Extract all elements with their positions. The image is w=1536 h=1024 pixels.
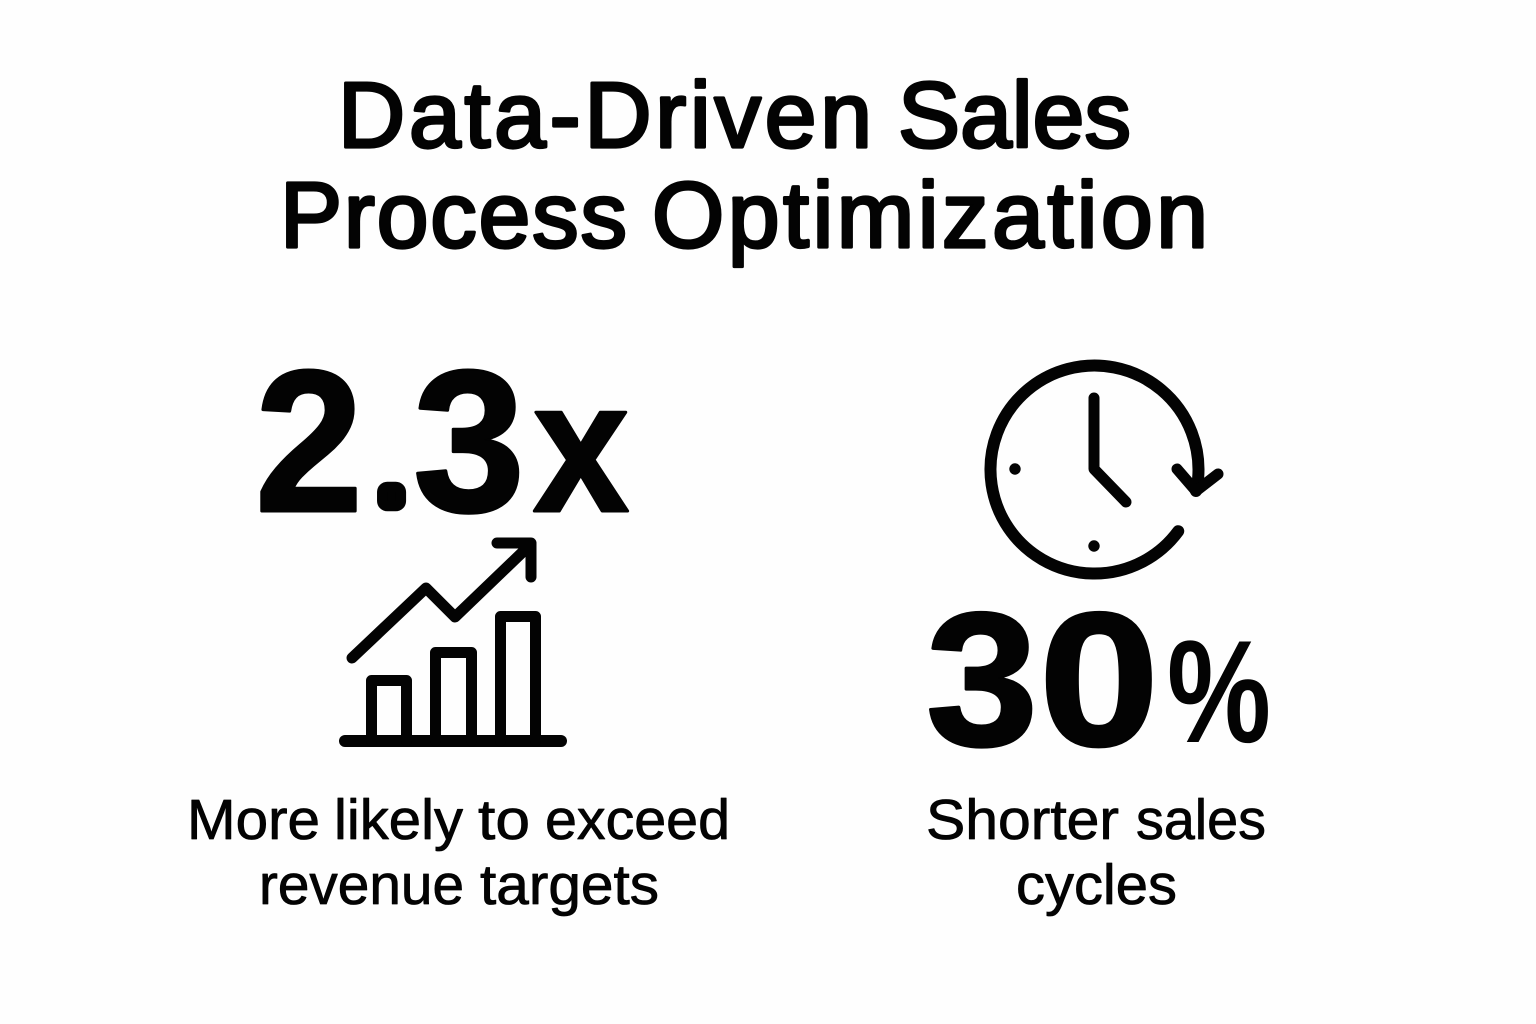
icon: growth bar chart with arrow <box>345 543 561 741</box>
label: revenue targets: targets <box>480 853 659 917</box>
stat: 30%: % <box>1167 610 1271 773</box>
stat: 2.3x <box>255 328 629 554</box>
label: sales cycles: Shorter <box>926 788 1119 852</box>
label: sales cycles <box>926 788 1266 917</box>
stat: 30% <box>926 574 1271 786</box>
stat: 2.3x: 3 <box>413 328 525 554</box>
stat: 30%: 3 <box>926 574 1038 786</box>
label: revenue targets: to <box>478 788 530 852</box>
label: sales cycles: sales <box>1136 788 1266 852</box>
title: Data-Driven <box>338 63 872 167</box>
label: revenue targets: exceed <box>545 788 730 852</box>
title: Sales <box>898 63 1131 167</box>
label: revenue targets <box>187 788 730 917</box>
stat: 2.3x: 2 <box>255 328 363 554</box>
title <box>280 63 1208 267</box>
title: Process <box>280 163 627 267</box>
stat: 2.3x: . <box>383 447 400 514</box>
stat: 30%: 0 <box>1039 574 1159 786</box>
title: Optimization <box>652 163 1208 267</box>
icon: clock with circular arrow <box>990 366 1218 574</box>
stat: 2.3x: x <box>533 342 629 551</box>
label: revenue targets: revenue <box>259 853 464 917</box>
label: sales cycles: cycles <box>1016 853 1177 917</box>
label: revenue targets: likely <box>334 788 463 852</box>
label: revenue targets: More <box>187 788 320 852</box>
